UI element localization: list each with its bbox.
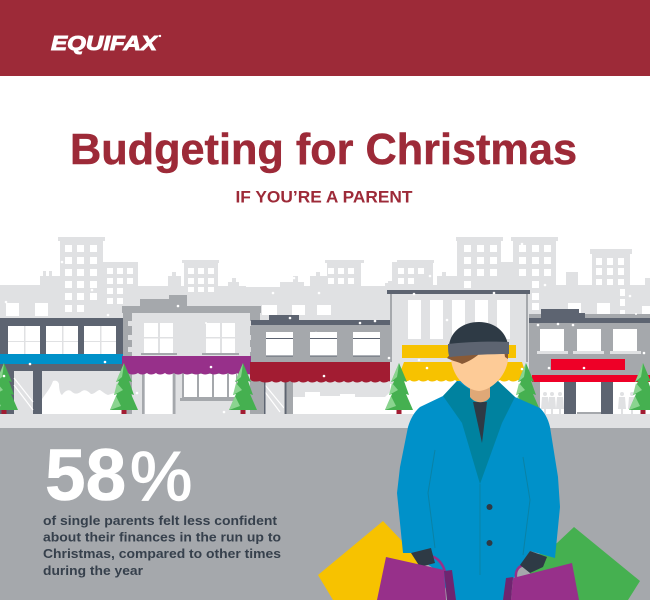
coat collar [443,381,515,484]
statistic description: Christmas, compared to other times [43,546,281,561]
shirt [473,402,487,443]
gloves [411,548,547,573]
purple shopping bag right [511,563,579,600]
shop: blue front [0,318,123,414]
header banner [0,0,650,76]
christmas trees [0,363,650,414]
snowflakes [3,243,645,413]
coat buttons [486,504,492,546]
statistic description [43,513,281,578]
blue coat [397,381,560,600]
statistic: 58%: 58 [45,435,126,516]
statistic: 58%: % [130,437,192,515]
purple bag left side [444,570,456,600]
statistic description: about their finances in the run up to [43,530,281,544]
face [451,350,508,391]
shopper figure [318,322,640,600]
subtitle: IF YOU’RE A PARENT [236,189,412,207]
pavement [0,414,650,428]
purple shopping bag left [377,557,446,600]
street [0,428,650,600]
shop: yellow awning [387,290,530,414]
title: Budgeting for Christmas [70,125,577,174]
neck [470,383,490,402]
purple bag right side [503,577,513,600]
background city skyline [0,237,650,414]
green shopping bag [530,527,640,600]
statistic description: during the year [43,563,143,578]
hat [449,322,508,345]
statistic description: of single parents felt less confident [43,513,278,528]
shopping bag handles [431,556,524,578]
shop: purple awning [122,295,261,414]
shop: maroon awning [250,315,399,414]
logo: Equifax: EQUIFAX [51,33,159,55]
shop: red sign [529,309,650,423]
hair [447,350,508,364]
yellow shopping bag [318,521,420,600]
hat band [448,342,509,357]
coat seams [428,450,530,575]
